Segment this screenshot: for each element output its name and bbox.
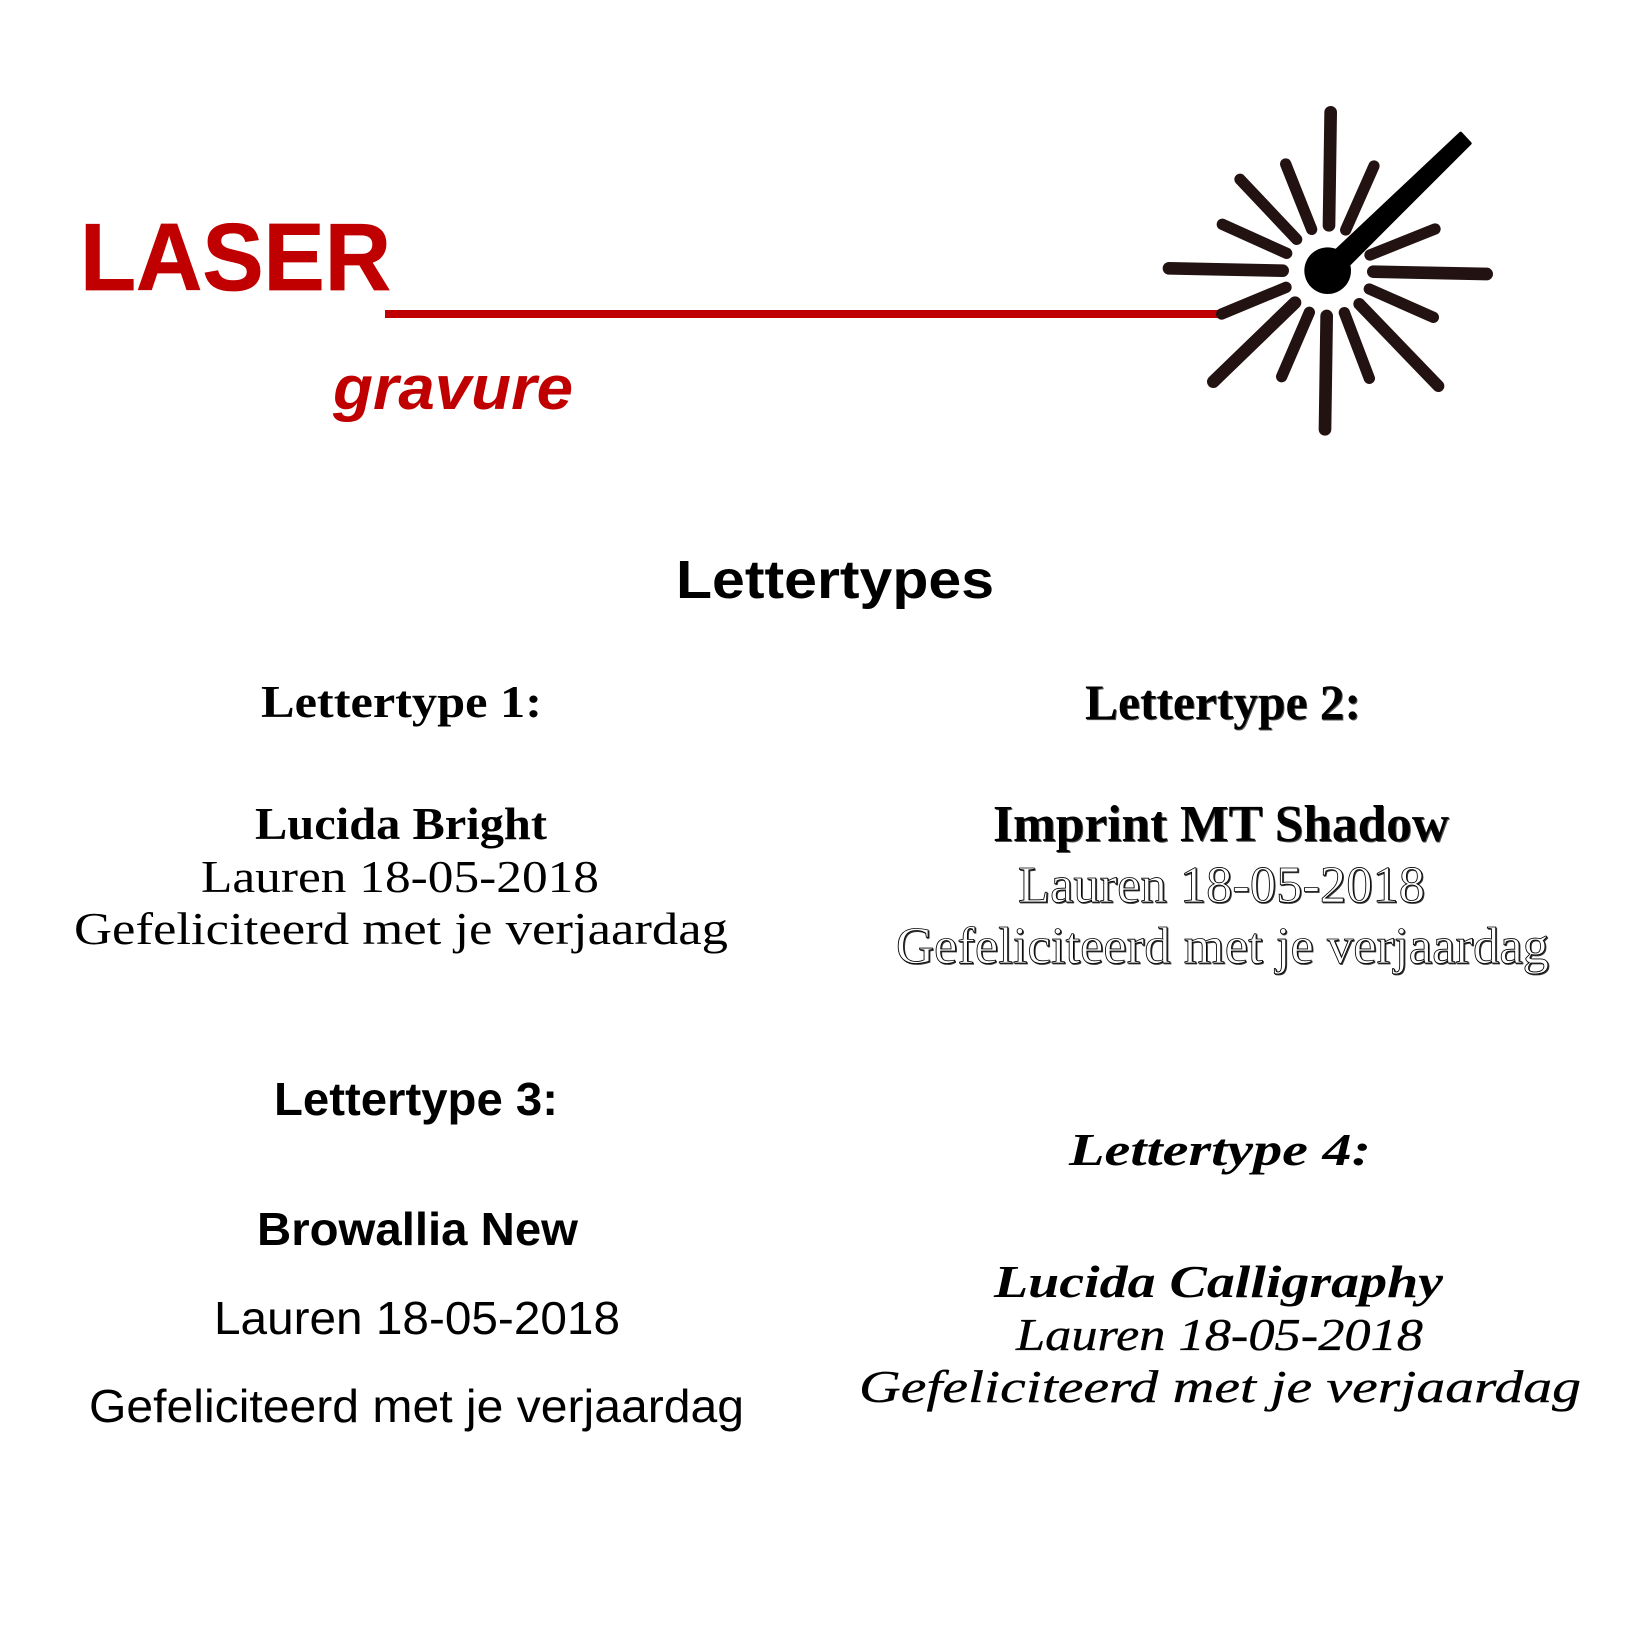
icon: laser starburst [1169, 112, 1487, 429]
font name: Imprint MT Shadow: Imprint MT Shadow [993, 796, 1449, 853]
sample line: greeting: Gefeliciteerd met je verjaardag [896, 918, 1549, 975]
panel: lettertype 2 [896, 674, 1549, 975]
sample line: name and date: Lauren 18-05-2018 [1018, 857, 1425, 914]
sample line: name and date: Lauren 18-05-2018 [201, 851, 599, 902]
sample line: name and date: Lauren 18-05-2018 [1015, 1309, 1423, 1360]
laser beam line [385, 310, 1219, 318]
font name: Lucida Bright: Lucida Bright [255, 798, 548, 849]
font name: Browallia New: Browallia New [257, 1203, 578, 1255]
label: Lettertype 2: Lettertype 2: [1085, 674, 1361, 730]
sample line: greeting: Gefeliciteerd met je verjaardag [89, 1380, 744, 1432]
main heading: Lettertypes [676, 550, 994, 610]
sample line: greeting: Gefeliciteerd met je verjaardag [859, 1361, 1581, 1412]
panel: lettertype 4 [859, 1124, 1581, 1412]
panel: lettertype 3 [89, 1073, 744, 1432]
logo word: gravure: gravure [332, 354, 573, 423]
label: Lettertype 1: Lettertype 1: [261, 676, 542, 727]
panel: lettertype 1 [74, 676, 728, 954]
font name: Lucida Calligraphy: Lucida Calligraphy [993, 1256, 1444, 1307]
label: Lettertype 3: Lettertype 3: [274, 1073, 558, 1125]
sample line: name and date: Lauren 18-05-2018 [214, 1292, 620, 1344]
sample line: greeting: Gefeliciteerd met je verjaardag [74, 903, 728, 954]
label: Lettertype 4: Lettertype 4: [1068, 1124, 1371, 1175]
logo word: LASER: LASER [80, 204, 391, 311]
